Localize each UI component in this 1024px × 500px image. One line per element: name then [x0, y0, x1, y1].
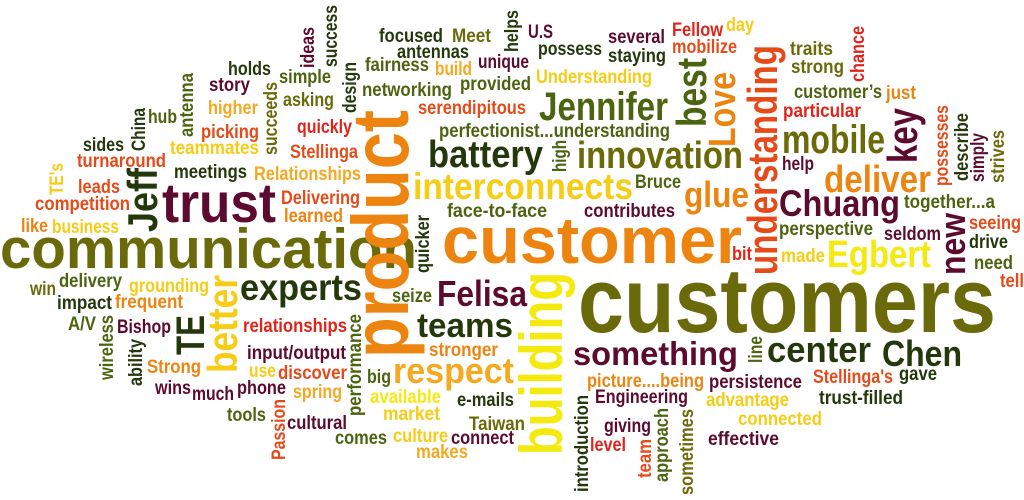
- word: giving: giving: [604, 415, 651, 437]
- word: deliver: deliver: [824, 159, 931, 201]
- word: fairness: fairness: [365, 54, 429, 76]
- word: Taiwan: Taiwan: [469, 413, 525, 435]
- word: customer's: customer’s: [794, 81, 882, 103]
- word: new: new: [932, 212, 973, 275]
- word: quickly: quickly: [297, 116, 352, 138]
- word: wireless: wireless: [96, 315, 118, 381]
- word: center: center: [767, 329, 871, 370]
- word: battery: battery: [428, 134, 543, 176]
- word: help: help: [782, 153, 814, 175]
- word: impact: impact: [57, 292, 112, 314]
- word: line: line: [745, 336, 767, 363]
- word: Relationships: Relationships: [254, 163, 361, 185]
- word: teams: teams: [417, 307, 513, 345]
- word: communication: communication: [0, 217, 417, 281]
- word: networking: networking: [362, 79, 452, 101]
- word: phone: phone: [237, 377, 286, 399]
- word: leads: leads: [78, 176, 120, 198]
- word: day: day: [726, 14, 754, 36]
- word: cultural: cultural: [287, 412, 347, 434]
- word: effective: effective: [708, 428, 779, 450]
- word: e-mails: e-mails: [457, 389, 514, 411]
- word: best: best: [668, 58, 715, 127]
- word: possesses: possesses: [931, 105, 953, 186]
- word: discover: discover: [278, 362, 347, 384]
- word: trust: trust: [162, 171, 276, 234]
- word: focused: focused: [379, 25, 443, 47]
- word: Bishop: Bishop: [117, 316, 171, 338]
- word: Strong: Strong: [147, 356, 201, 378]
- word: experts: experts: [240, 267, 362, 308]
- word: provided: provided: [460, 73, 531, 95]
- word: teammates: teammates: [170, 137, 259, 159]
- word: staying: staying: [608, 45, 666, 67]
- word: antenna: antenna: [176, 73, 198, 137]
- word: need: need: [974, 252, 1013, 274]
- word: TE: TE: [169, 315, 213, 355]
- word: much: much: [192, 383, 234, 405]
- word: strives: strives: [987, 130, 1009, 183]
- word: Jeff: Jeff: [119, 167, 166, 232]
- word: ability: ability: [125, 339, 147, 386]
- word: glue: glue: [684, 174, 749, 215]
- word: mobile: mobile: [782, 118, 885, 162]
- word: serendipitous: serendipitous: [418, 97, 526, 119]
- word: Understanding: Understanding: [536, 66, 652, 88]
- word: meetings: meetings: [174, 161, 247, 183]
- word: connected: connected: [738, 408, 822, 430]
- word: Delivering: Delivering: [281, 187, 360, 209]
- word: interconnects: interconnects: [413, 166, 633, 207]
- word: culture: culture: [393, 425, 448, 447]
- word: design: design: [339, 62, 361, 113]
- word: build: build: [435, 58, 472, 80]
- word: competition: competition: [35, 193, 130, 215]
- word: use: use: [249, 360, 276, 382]
- word: relationships: relationships: [243, 315, 347, 337]
- word: team: team: [634, 439, 656, 478]
- word: turnaround: turnaround: [77, 150, 166, 172]
- word: simply: simply: [967, 133, 989, 182]
- word: succeeds: succeeds: [260, 82, 282, 155]
- word: perfectionist...understanding: perfectionist...understanding: [439, 120, 670, 142]
- word: sides: sides: [83, 134, 124, 156]
- word: higher: higher: [208, 97, 258, 119]
- word: learned: learned: [284, 205, 343, 227]
- word: performance: performance: [344, 314, 366, 416]
- word: Meet: Meet: [452, 25, 491, 47]
- word: quicker: quicker: [412, 215, 434, 273]
- word: Egbert: Egbert: [827, 234, 931, 276]
- word: level: level: [590, 434, 626, 456]
- word: like: like: [21, 215, 48, 237]
- word: drive: drive: [969, 231, 1008, 253]
- word: building: building: [508, 272, 575, 455]
- word: hub: hub: [148, 106, 177, 128]
- word: sometimes: sometimes: [676, 409, 698, 495]
- word: China: China: [128, 108, 150, 151]
- word: seize: seize: [392, 285, 432, 307]
- word: TE's: TE's: [46, 163, 68, 195]
- word: together...a: together...a: [904, 191, 995, 213]
- word: strong: strong: [791, 56, 844, 78]
- word: connect: connect: [451, 427, 514, 449]
- word: advantage: advantage: [706, 389, 789, 411]
- word: business: business: [52, 216, 119, 238]
- word: trust-filled: trust-filled: [819, 387, 903, 409]
- word: ideas: ideas: [297, 27, 319, 68]
- word: makes: makes: [416, 441, 468, 463]
- word: face-to-face: face-to-face: [447, 200, 547, 222]
- word: mobilize: mobilize: [672, 36, 737, 58]
- word: just: just: [885, 82, 916, 104]
- word: picture....being: picture....being: [587, 370, 704, 392]
- word: frequent: frequent: [115, 291, 183, 313]
- word: describe: describe: [951, 113, 973, 181]
- word: innovation: innovation: [577, 135, 743, 177]
- word: market: market: [383, 403, 440, 425]
- word: Bruce: Bruce: [635, 171, 681, 193]
- word: unique: unique: [478, 51, 529, 73]
- word: respect: respect: [393, 350, 514, 391]
- word: gave: gave: [899, 363, 937, 385]
- word: holds: holds: [228, 58, 271, 80]
- word: customer: customer: [442, 203, 742, 277]
- word: spring: spring: [293, 381, 342, 403]
- word: helps: helps: [501, 10, 523, 52]
- word: Love: Love: [702, 72, 744, 147]
- word: contributes: contributes: [584, 200, 675, 222]
- word: Stellinga's: Stellinga's: [813, 366, 893, 388]
- word: picking: picking: [201, 121, 259, 143]
- word: Chen: Chen: [882, 333, 962, 374]
- word: Passion: Passion: [268, 399, 290, 460]
- word: introduction: introduction: [571, 395, 593, 492]
- word: simple: simple: [279, 66, 331, 88]
- word: chance: chance: [847, 26, 869, 82]
- word: antennas: antennas: [397, 41, 469, 63]
- word: better: better: [199, 275, 246, 373]
- word: stronger: stronger: [429, 339, 498, 361]
- word: Felisa: Felisa: [437, 273, 528, 314]
- word: approach: approach: [651, 408, 673, 482]
- word: high: high: [549, 140, 571, 172]
- word: input/output: input/output: [247, 342, 346, 364]
- word: key: key: [879, 107, 926, 163]
- word: story: story: [209, 74, 250, 96]
- word: Jennifer: Jennifer: [539, 85, 668, 129]
- word: wins: wins: [154, 377, 191, 399]
- word: perspective: perspective: [779, 218, 873, 240]
- word: asking: asking: [283, 89, 334, 111]
- word: win: win: [29, 278, 56, 300]
- word: seldom: seldom: [884, 223, 941, 245]
- word: made: made: [781, 245, 825, 267]
- word: Chuang: Chuang: [779, 183, 900, 224]
- word: big: big: [367, 366, 391, 388]
- word: particular: particular: [783, 100, 861, 122]
- word: delivery: delivery: [59, 270, 122, 292]
- word: Fellow: Fellow: [672, 19, 724, 41]
- word: bit: bit: [732, 243, 752, 265]
- word: several: several: [608, 26, 665, 48]
- word: Engineering: Engineering: [595, 386, 688, 408]
- word: Stellinga: Stellinga: [290, 141, 358, 163]
- word: U.S: U.S: [528, 21, 553, 43]
- word: possess: possess: [538, 38, 602, 60]
- word: A/V: A/V: [68, 313, 96, 335]
- word: something: something: [573, 335, 738, 372]
- word: grounding: grounding: [129, 275, 209, 297]
- word: available: available: [370, 386, 441, 408]
- word: comes: comes: [335, 427, 387, 449]
- word: tools: tools: [227, 404, 266, 426]
- word: traits: traits: [790, 38, 833, 60]
- word: persistence: persistence: [709, 371, 802, 393]
- word: product: product: [336, 110, 425, 358]
